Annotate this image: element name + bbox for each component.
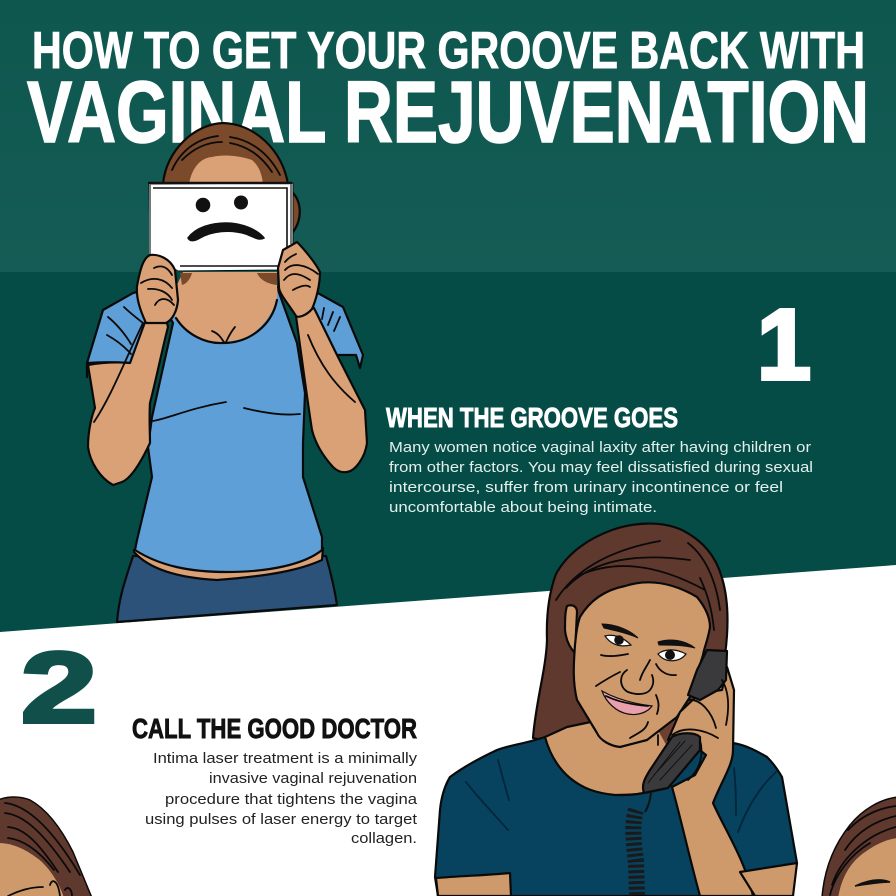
- section 1 body text: from other factors. You may feel dissatisfied during sexual: [389, 459, 813, 476]
- hair under card: [180, 273, 277, 285]
- ear: [565, 605, 577, 653]
- jeans: [117, 556, 337, 622]
- section 2 body text: procedure that tightens the vagina: [165, 791, 418, 808]
- illustration: smiling woman on the phone: [435, 524, 797, 896]
- phone cord: [633, 793, 651, 896]
- right sleeve: [310, 292, 363, 368]
- left arm: [88, 322, 168, 485]
- section 2 white slanted panel: [0, 565, 896, 896]
- eyes: [605, 635, 686, 661]
- jaw shading: [630, 722, 658, 745]
- sad face card: [148, 183, 293, 271]
- right arm: [296, 308, 367, 472]
- step number 1: 1: [757, 289, 811, 401]
- brows: [602, 624, 695, 648]
- left arm: [436, 873, 511, 896]
- section 2 body text: using pulses of laser energy to target: [145, 811, 418, 828]
- sleeve and shirt folds: [107, 307, 340, 421]
- right sleeve cuff arm: [740, 863, 797, 896]
- section 2 body text: [145, 750, 418, 847]
- fingers: [672, 680, 728, 780]
- section 1 heading: WHEN THE GROOVE GOES: [386, 402, 678, 433]
- left sleeve: [87, 285, 165, 377]
- section 2 heading: CALL THE GOOD DOCTOR: [132, 713, 417, 744]
- shirt: [435, 737, 797, 896]
- neckline: [176, 300, 277, 343]
- arm creases: [94, 323, 355, 422]
- sad mouth: [188, 223, 264, 241]
- neck and chest: [545, 715, 672, 795]
- face: [574, 582, 710, 747]
- shadow behind jaw: [655, 690, 712, 748]
- section 1 dark green panel: [0, 272, 896, 642]
- midriff: [134, 548, 323, 580]
- illustration: cropped head bottom left: [0, 797, 92, 896]
- hand and forearm: [668, 667, 753, 896]
- right hand: [278, 242, 320, 317]
- title: [27, 22, 869, 161]
- hair: [160, 123, 300, 240]
- phone: [643, 650, 727, 793]
- mouth: [602, 691, 652, 715]
- torso shirt: [135, 287, 322, 572]
- section 2 body text: Intima laser treatment is a minimally: [153, 750, 418, 767]
- header band: [0, 0, 896, 273]
- hair strands: [556, 541, 720, 630]
- left hand: [137, 255, 178, 323]
- finger lines: [141, 254, 318, 305]
- step number 2: 2: [21, 632, 97, 744]
- sad eyes: [196, 198, 210, 212]
- hair: [533, 524, 727, 745]
- section 1 body text: Many women notice vaginal laxity after having children or: [389, 439, 811, 456]
- section 1 body text: uncomfortable about being intimate.: [389, 499, 657, 516]
- shirt folds: [466, 760, 776, 832]
- section 2 body text: invasive vaginal rejuvenation: [209, 770, 417, 787]
- chest and neck: [170, 272, 277, 342]
- illustration: cropped head bottom right: [822, 797, 896, 896]
- section 2 body text: collagen.: [351, 830, 417, 847]
- section 1 body text: [389, 439, 813, 516]
- illustration: woman holding sad face card: [87, 123, 367, 622]
- eye creases and nose: [596, 654, 676, 714]
- hair strands: [172, 136, 280, 175]
- forehead: [189, 156, 263, 184]
- cleavage: [212, 327, 235, 342]
- section 1 body text: intercourse, suffer from urinary incontinence or feel: [389, 479, 783, 496]
